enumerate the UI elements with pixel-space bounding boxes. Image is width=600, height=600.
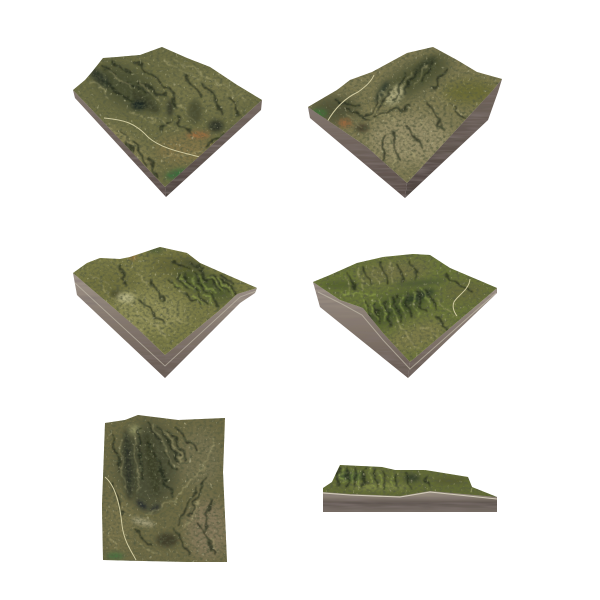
block 6 cross-section bbox=[323, 489, 497, 512]
terrain block 6: side elevation view bbox=[320, 462, 500, 512]
block 1 road bbox=[104, 118, 200, 157]
block 6 strata line bbox=[323, 492, 497, 499]
block 3 left side bbox=[73, 273, 165, 378]
block 1 right side bbox=[165, 100, 262, 197]
block 4 left side bbox=[313, 282, 410, 378]
terrain block 3: isometric view, exposed strata bbox=[70, 245, 260, 378]
block 5 road bbox=[105, 477, 136, 560]
block 2 left side bbox=[308, 107, 407, 198]
block 2 top surface bbox=[305, 45, 505, 185]
block 4 right side bbox=[408, 288, 497, 378]
block 6 top surface bbox=[323, 465, 497, 497]
block 4 strata line bbox=[318, 292, 496, 369]
terrain block 5: top-down view bbox=[100, 412, 230, 564]
block 3 top surface bbox=[70, 245, 260, 357]
block 1 left side bbox=[73, 90, 166, 197]
terrain block 1: isometric view, road at front bbox=[70, 45, 265, 197]
block 4 road bbox=[453, 279, 470, 316]
terrain block 4: isometric view, ridge and cut profile bbox=[310, 250, 500, 378]
figure: six terrain block views bbox=[73, 47, 502, 562]
terrain block 2: isometric view, summit at back bbox=[305, 45, 505, 198]
block 2 right side bbox=[405, 79, 502, 198]
block 4 top surface bbox=[310, 250, 500, 365]
block 2 road bbox=[327, 75, 374, 122]
block 3 right side bbox=[165, 288, 257, 378]
block 1 top surface bbox=[70, 45, 265, 190]
block 3 strata line bbox=[75, 283, 256, 366]
block 5 surface bbox=[100, 412, 230, 564]
